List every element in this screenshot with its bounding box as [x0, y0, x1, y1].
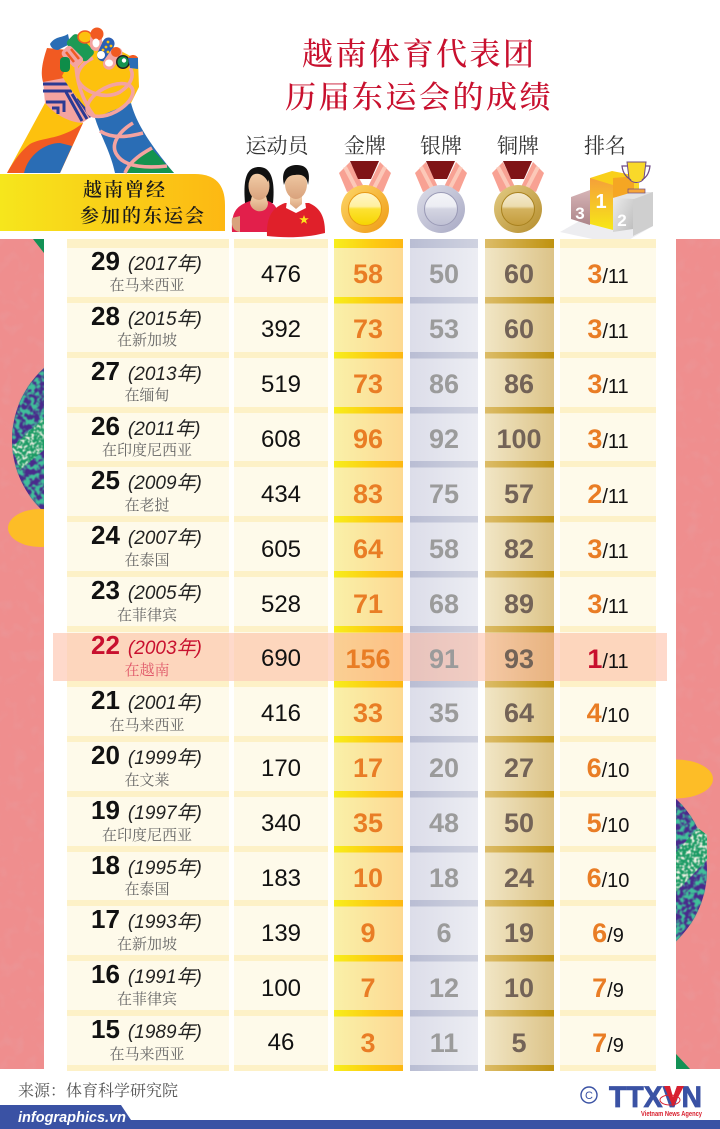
row: 17th Games 1993	[91, 904, 624, 953]
row: 23rd Games 2005: 23 (2005年)	[91, 575, 202, 605]
row: 15th Games 1989: 3	[360, 1028, 376, 1058]
icon: clasped hands	[7, 28, 174, 173]
row: 20th Games 1999	[91, 740, 629, 789]
row: 19th Games 1997: 48	[429, 808, 459, 838]
row: 19th Games 1997: 50	[504, 808, 534, 838]
row: 20th Games 1999: 17	[353, 753, 383, 783]
column heading: athletes: 运动员	[246, 134, 310, 158]
row: 24th Games 2007: 58	[429, 534, 459, 564]
row: 26th Games 2011: 3/11	[587, 424, 629, 454]
row: 17th Games 1993: 17 (1993年)	[91, 904, 202, 934]
row: 28th Games 2015: 392	[261, 316, 301, 343]
row: 18th Games 1995: 6/10	[587, 863, 629, 893]
row: 23rd Games 2005: 89	[504, 589, 534, 619]
row: 22nd Games 2003: 690	[261, 645, 301, 672]
row: 18th Games 1995: 在泰国	[124, 881, 170, 898]
row: 27th Games 2013: 519	[261, 371, 301, 398]
row: 15th Games 1989	[91, 1014, 624, 1063]
highlight band: host year 2003	[53, 633, 667, 681]
row: 21st Games 2001: 在马来西亚	[109, 717, 185, 734]
row: 16th Games 1991: 16 (1991年)	[91, 959, 202, 989]
row: 20th Games 1999: 6/10	[587, 753, 629, 783]
row: 29th Games 2017: 58	[353, 259, 383, 289]
title: 历届东运会的成绩	[285, 80, 553, 115]
row: 23rd Games 2005: 在菲律宾	[117, 607, 177, 624]
row: 17th Games 1993: 19	[504, 918, 534, 948]
row: 16th Games 1991: 7	[360, 973, 376, 1003]
row: 27th Games 2013: 86	[504, 369, 534, 399]
row: 21st Games 2001: 21 (2001年)	[91, 685, 202, 715]
logo: TTXVN	[581, 1081, 703, 1118]
row: 22nd Games 2003	[91, 630, 629, 679]
row: 16th Games 1991: 10	[504, 973, 534, 1003]
column heading: gold: 金牌	[344, 134, 386, 158]
row: 15th Games 1989: 7/9	[592, 1028, 624, 1058]
row: 21st Games 2001	[91, 685, 629, 734]
row: 27th Games 2013: 73	[353, 369, 383, 399]
row: 29th Games 2017: 3/11	[587, 259, 629, 289]
row: 21st Games 2001: 416	[261, 700, 301, 727]
row: 24th Games 2007	[91, 520, 629, 569]
row: 29th Games 2017	[91, 246, 629, 294]
row: 28th Games 2015: 3/11	[587, 314, 629, 344]
row: 26th Games 2011: 92	[429, 424, 459, 454]
logo: TTXVN: Vietnam News Agency	[641, 1109, 703, 1118]
row: 26th Games 2011: 在印度尼西亚	[102, 441, 192, 459]
title	[285, 37, 553, 115]
row: 18th Games 1995: 18	[429, 863, 459, 893]
row: 15th Games 1989: 11	[430, 1028, 458, 1058]
row: 23rd Games 2005: 71	[353, 589, 383, 619]
row: 16th Games 1991	[91, 959, 624, 1008]
row: 28th Games 2015	[91, 301, 629, 349]
table column backgrounds	[67, 239, 656, 1071]
row: 17th Games 1993: 139	[261, 920, 301, 947]
row: 24th Games 2007: 24 (2007年)	[91, 520, 202, 550]
row: 15th Games 1989: 46	[268, 1029, 294, 1056]
row: 16th Games 1991: 7/9	[592, 973, 624, 1003]
row: 21st Games 2001: 33	[353, 698, 383, 728]
row: 22nd Games 2003: 在越南	[124, 662, 170, 679]
row: 28th Games 2015: 60	[504, 314, 534, 344]
row: 22nd Games 2003: 22 (2003年)	[91, 630, 202, 660]
column heading: rank: 排名	[584, 134, 626, 158]
row: 21st Games 2001: 35	[429, 698, 459, 728]
icon: gold medal	[339, 161, 391, 233]
row: 25th Games 2009: 2/11	[587, 479, 629, 509]
footer bar: infographics.vn	[18, 1110, 126, 1126]
row: 25th Games 2009: 在老挝	[124, 496, 170, 514]
row: 29th Games 2017: 50	[429, 259, 459, 289]
row: 22nd Games 2003: 93	[504, 644, 534, 674]
row: 21st Games 2001: 64	[504, 698, 534, 728]
row: 15th Games 1989: 5	[511, 1028, 527, 1058]
icon: athletes	[232, 165, 325, 237]
row: 16th Games 1991: 100	[261, 975, 301, 1002]
row: 23rd Games 2005: 528	[261, 591, 301, 618]
row: 24th Games 2007: 在泰国	[124, 552, 170, 569]
row: 24th Games 2007: 605	[261, 536, 301, 563]
row: 16th Games 1991: 在菲律宾	[117, 991, 177, 1008]
row: 19th Games 1997: 5/10	[587, 808, 629, 838]
panel: left decorative strip	[0, 239, 44, 1069]
panel: SEA Games heading band: 参加的东运会	[80, 205, 206, 227]
row: 22nd Games 2003: 156	[345, 644, 391, 674]
row: 25th Games 2009	[91, 465, 629, 514]
row: 15th Games 1989: 在马来西亚	[109, 1046, 185, 1063]
row: 24th Games 2007: 64	[353, 534, 383, 564]
row: 19th Games 1997: 19 (1997年)	[91, 795, 202, 825]
row: 18th Games 1995: 183	[261, 865, 301, 892]
row: 26th Games 2011: 96	[353, 424, 383, 454]
row: 25th Games 2009: 75	[429, 479, 459, 509]
row: 27th Games 2013: 27 (2013年)	[91, 356, 202, 386]
column heading: silver: 银牌	[420, 134, 462, 158]
row: 17th Games 1993: 在新加坡	[117, 936, 177, 953]
icon: silver medal	[415, 161, 467, 233]
row: 29th Games 2017: 60	[504, 259, 534, 289]
row: 29th Games 2017: 在马来西亚	[109, 277, 185, 294]
row: 29th Games 2017: 476	[261, 261, 301, 288]
row: 20th Games 1999: 20 (1999年)	[91, 740, 202, 770]
row: 20th Games 1999: 170	[261, 755, 301, 782]
row: 27th Games 2013: 86	[429, 369, 459, 399]
row: 20th Games 1999: 在文莱	[124, 771, 170, 789]
row: 17th Games 1993: 6/9	[592, 918, 624, 948]
row: 18th Games 1995: 24	[504, 863, 534, 893]
panel: right decorative strip	[676, 239, 720, 1069]
icon: podium and trophy: 3	[575, 204, 585, 223]
row: 18th Games 1995: 10	[353, 863, 383, 893]
row: 24th Games 2007: 3/11	[587, 534, 629, 564]
row: 29th Games 2017: 29 (2017年)	[91, 246, 202, 276]
row: 22nd Games 2003: 91	[429, 644, 459, 674]
row: 28th Games 2015: 28 (2015年)	[91, 301, 202, 331]
row: 25th Games 2009: 25 (2009年)	[91, 465, 202, 495]
row: 25th Games 2009: 83	[353, 479, 383, 509]
row: 28th Games 2015: 73	[353, 314, 383, 344]
row: 23rd Games 2005: 68	[429, 589, 459, 619]
source note: 来源：体育科学研究院	[18, 1082, 178, 1100]
icon: podium and trophy: 1	[595, 191, 607, 213]
row: 16th Games 1991: 12	[429, 973, 459, 1003]
footer bar	[0, 1105, 720, 1129]
row: 23rd Games 2005: 3/11	[587, 589, 629, 619]
row: 21st Games 2001: 4/10	[587, 698, 629, 728]
row: 15th Games 1989: 15 (1989年)	[91, 1014, 202, 1044]
row: 28th Games 2015: 53	[429, 314, 459, 344]
row: 18th Games 1995	[91, 850, 629, 898]
row: 20th Games 1999: 27	[504, 753, 534, 783]
row: 26th Games 2011: 608	[261, 426, 301, 453]
row: 19th Games 1997: 35	[353, 808, 383, 838]
row: 26th Games 2011: 100	[496, 424, 542, 454]
row: 26th Games 2011: 26 (2011年)	[91, 411, 200, 441]
panel: SEA Games heading band: 越南曾经	[83, 178, 167, 201]
row: 22nd Games 2003: 1/11	[587, 644, 629, 674]
icon: bronze medal	[492, 161, 544, 233]
row: 19th Games 1997	[91, 795, 629, 844]
row: 27th Games 2013: 在缅甸	[124, 387, 170, 404]
row: 28th Games 2015: 在新加坡	[117, 332, 177, 349]
row: 27th Games 2013: 3/11	[587, 369, 629, 399]
row: 19th Games 1997: 在印度尼西亚	[102, 826, 192, 844]
row: 23rd Games 2005	[91, 575, 629, 624]
row: 27th Games 2013	[91, 356, 629, 404]
row: 17th Games 1993: 9	[360, 918, 376, 948]
icon: podium and trophy	[560, 162, 653, 245]
row: 24th Games 2007: 82	[504, 534, 534, 564]
row: 19th Games 1997: 340	[261, 810, 301, 837]
row: 17th Games 1993: 6	[436, 918, 452, 948]
logo: TTXVN: TTXVN	[609, 1081, 702, 1114]
row: 25th Games 2009: 434	[261, 481, 301, 508]
logo: TTXVN: C	[585, 1090, 593, 1102]
row: 18th Games 1995: 18 (1995年)	[91, 850, 202, 880]
column heading: bronze: 铜牌	[497, 134, 539, 158]
row: 25th Games 2009: 57	[504, 479, 534, 509]
icon: podium and trophy: 2	[617, 211, 627, 230]
title: 越南体育代表团	[302, 37, 536, 72]
row: 26th Games 2011	[91, 411, 629, 459]
row: 20th Games 1999: 20	[429, 753, 459, 783]
panel: SEA Games heading band	[0, 174, 225, 231]
